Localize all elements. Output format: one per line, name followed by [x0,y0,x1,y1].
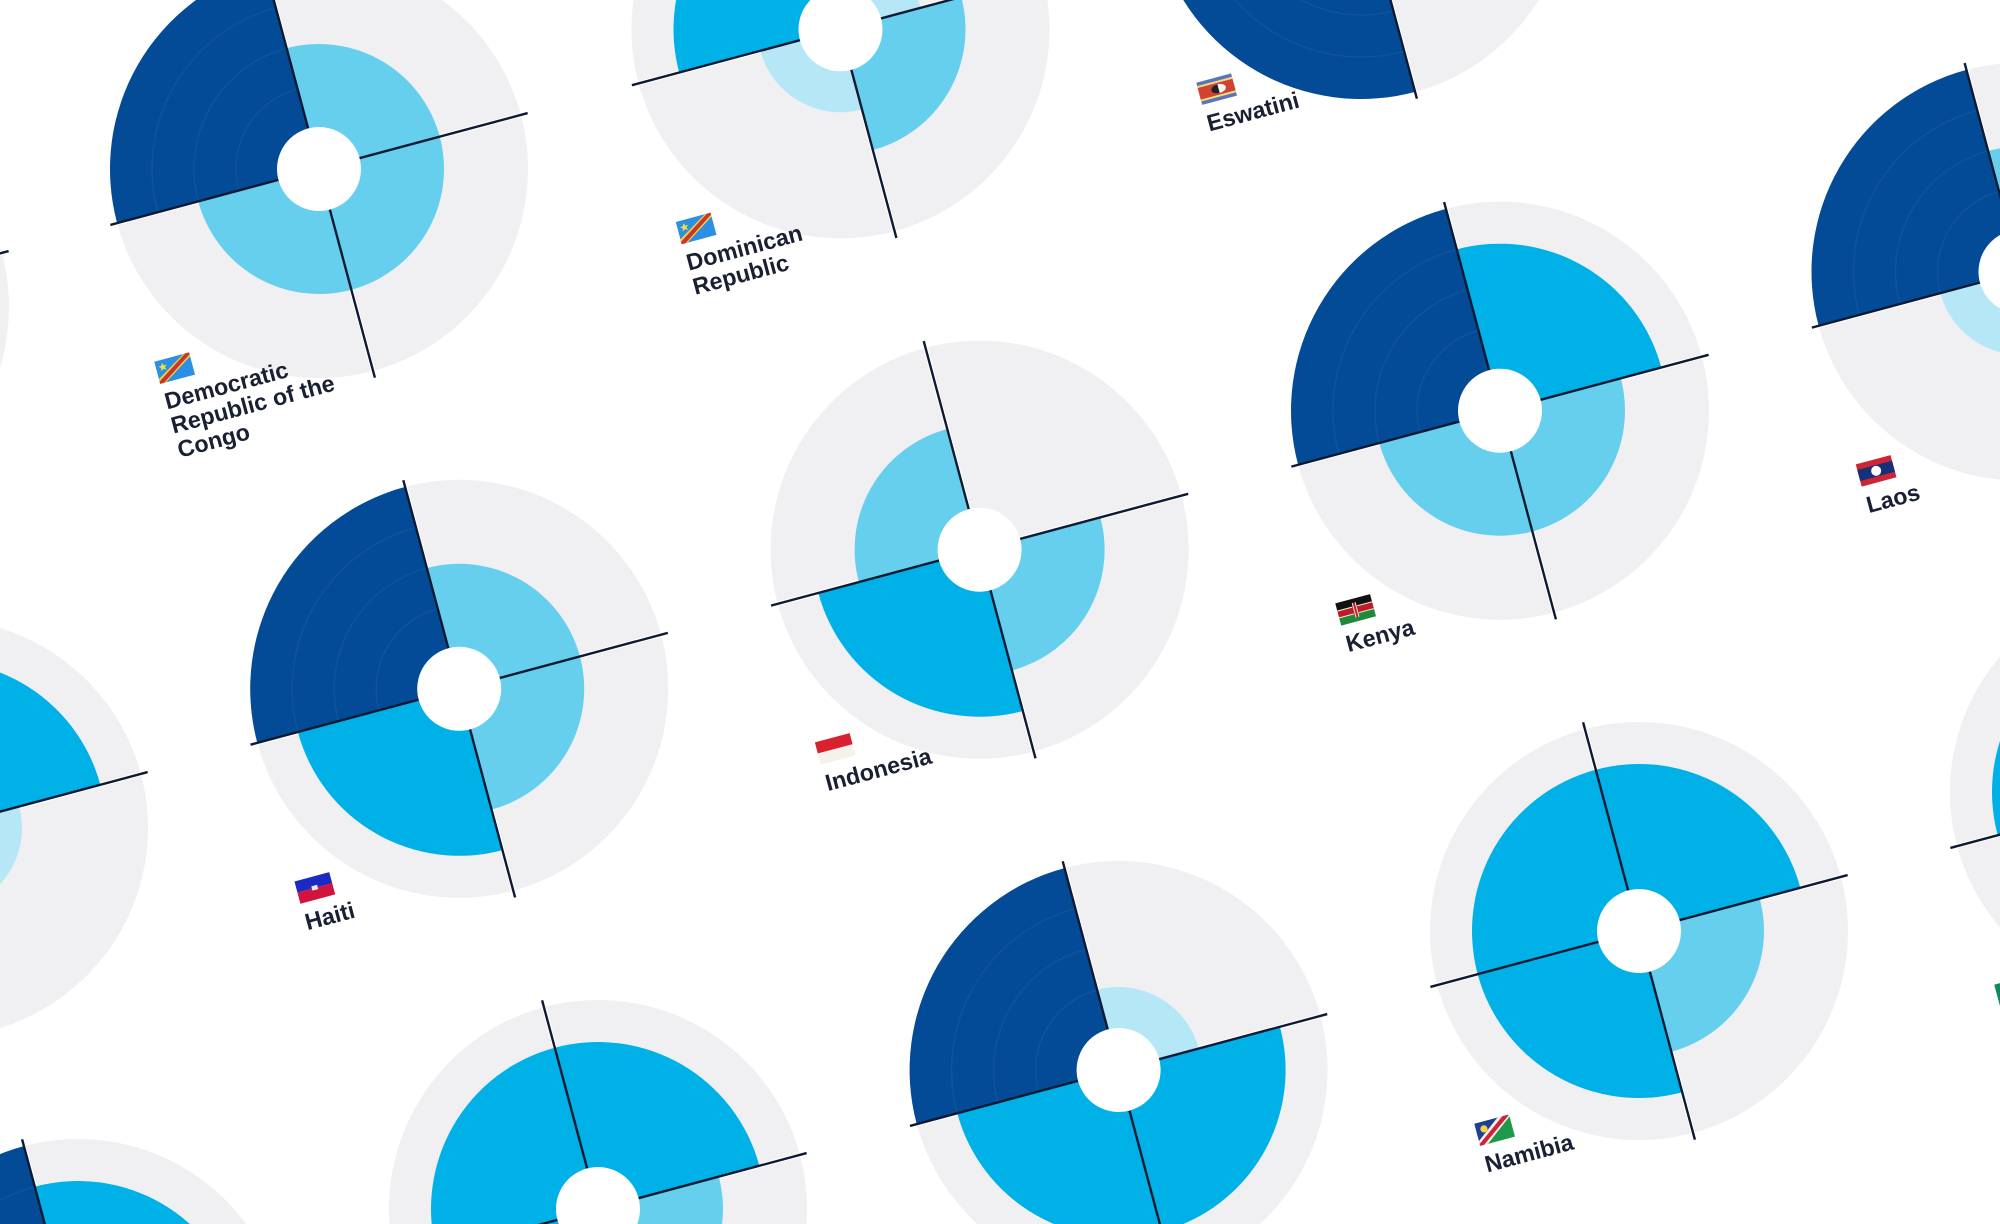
chart: Dominican Republic [576,0,1107,302]
flag: Indonesia [815,733,856,765]
flag: Dominican Republic [676,213,716,244]
chart: Haiti [195,424,724,953]
chart: Eswatini [1096,0,1626,155]
label: Kenya: Kenya [1343,614,1418,657]
chart: far left (clipped) [0,42,65,572]
chart: bottom middle [854,805,1383,1224]
label: Indonesia: Indonesia [822,742,935,796]
flag: Democratic Republic of the Congo [154,352,195,384]
chart: left (clipped) [0,563,204,1093]
flag: Namibia [1474,1114,1515,1146]
label: Haiti: Haiti [302,897,358,935]
chart: bottom left [333,944,863,1224]
flag: Eswatini [1196,73,1237,105]
chart: Namibia [1374,666,1904,1196]
label: Laos: Laos [1863,479,1923,518]
flag: Laos [1856,455,1896,487]
chart: Indonesia [715,285,1244,814]
label: Democratic Republic of the Congo: Republic of the [168,370,337,438]
label: Democratic Republic of the Congo: Congo [175,418,253,463]
chart: Laos [1756,7,2000,536]
flag: right edge [1994,975,2000,1007]
label: Dominican Republic: Republic [690,249,792,300]
flag: Haiti [294,872,335,904]
chart: Kenya [1235,146,1765,675]
chart: Democratic Republic of the Congo [54,0,592,464]
chart: right (clipped) [1894,527,2000,1057]
label: Democratic Republic of the Congo: Democratic [162,356,291,414]
label: Dominican Republic: Dominican [683,220,805,276]
label: Eswatini: Eswatini [1204,87,1302,136]
label: Namibia: Namibia [1482,1128,1577,1177]
flag: Kenya [1335,594,1376,626]
chart: bottom left corner [0,1083,343,1224]
